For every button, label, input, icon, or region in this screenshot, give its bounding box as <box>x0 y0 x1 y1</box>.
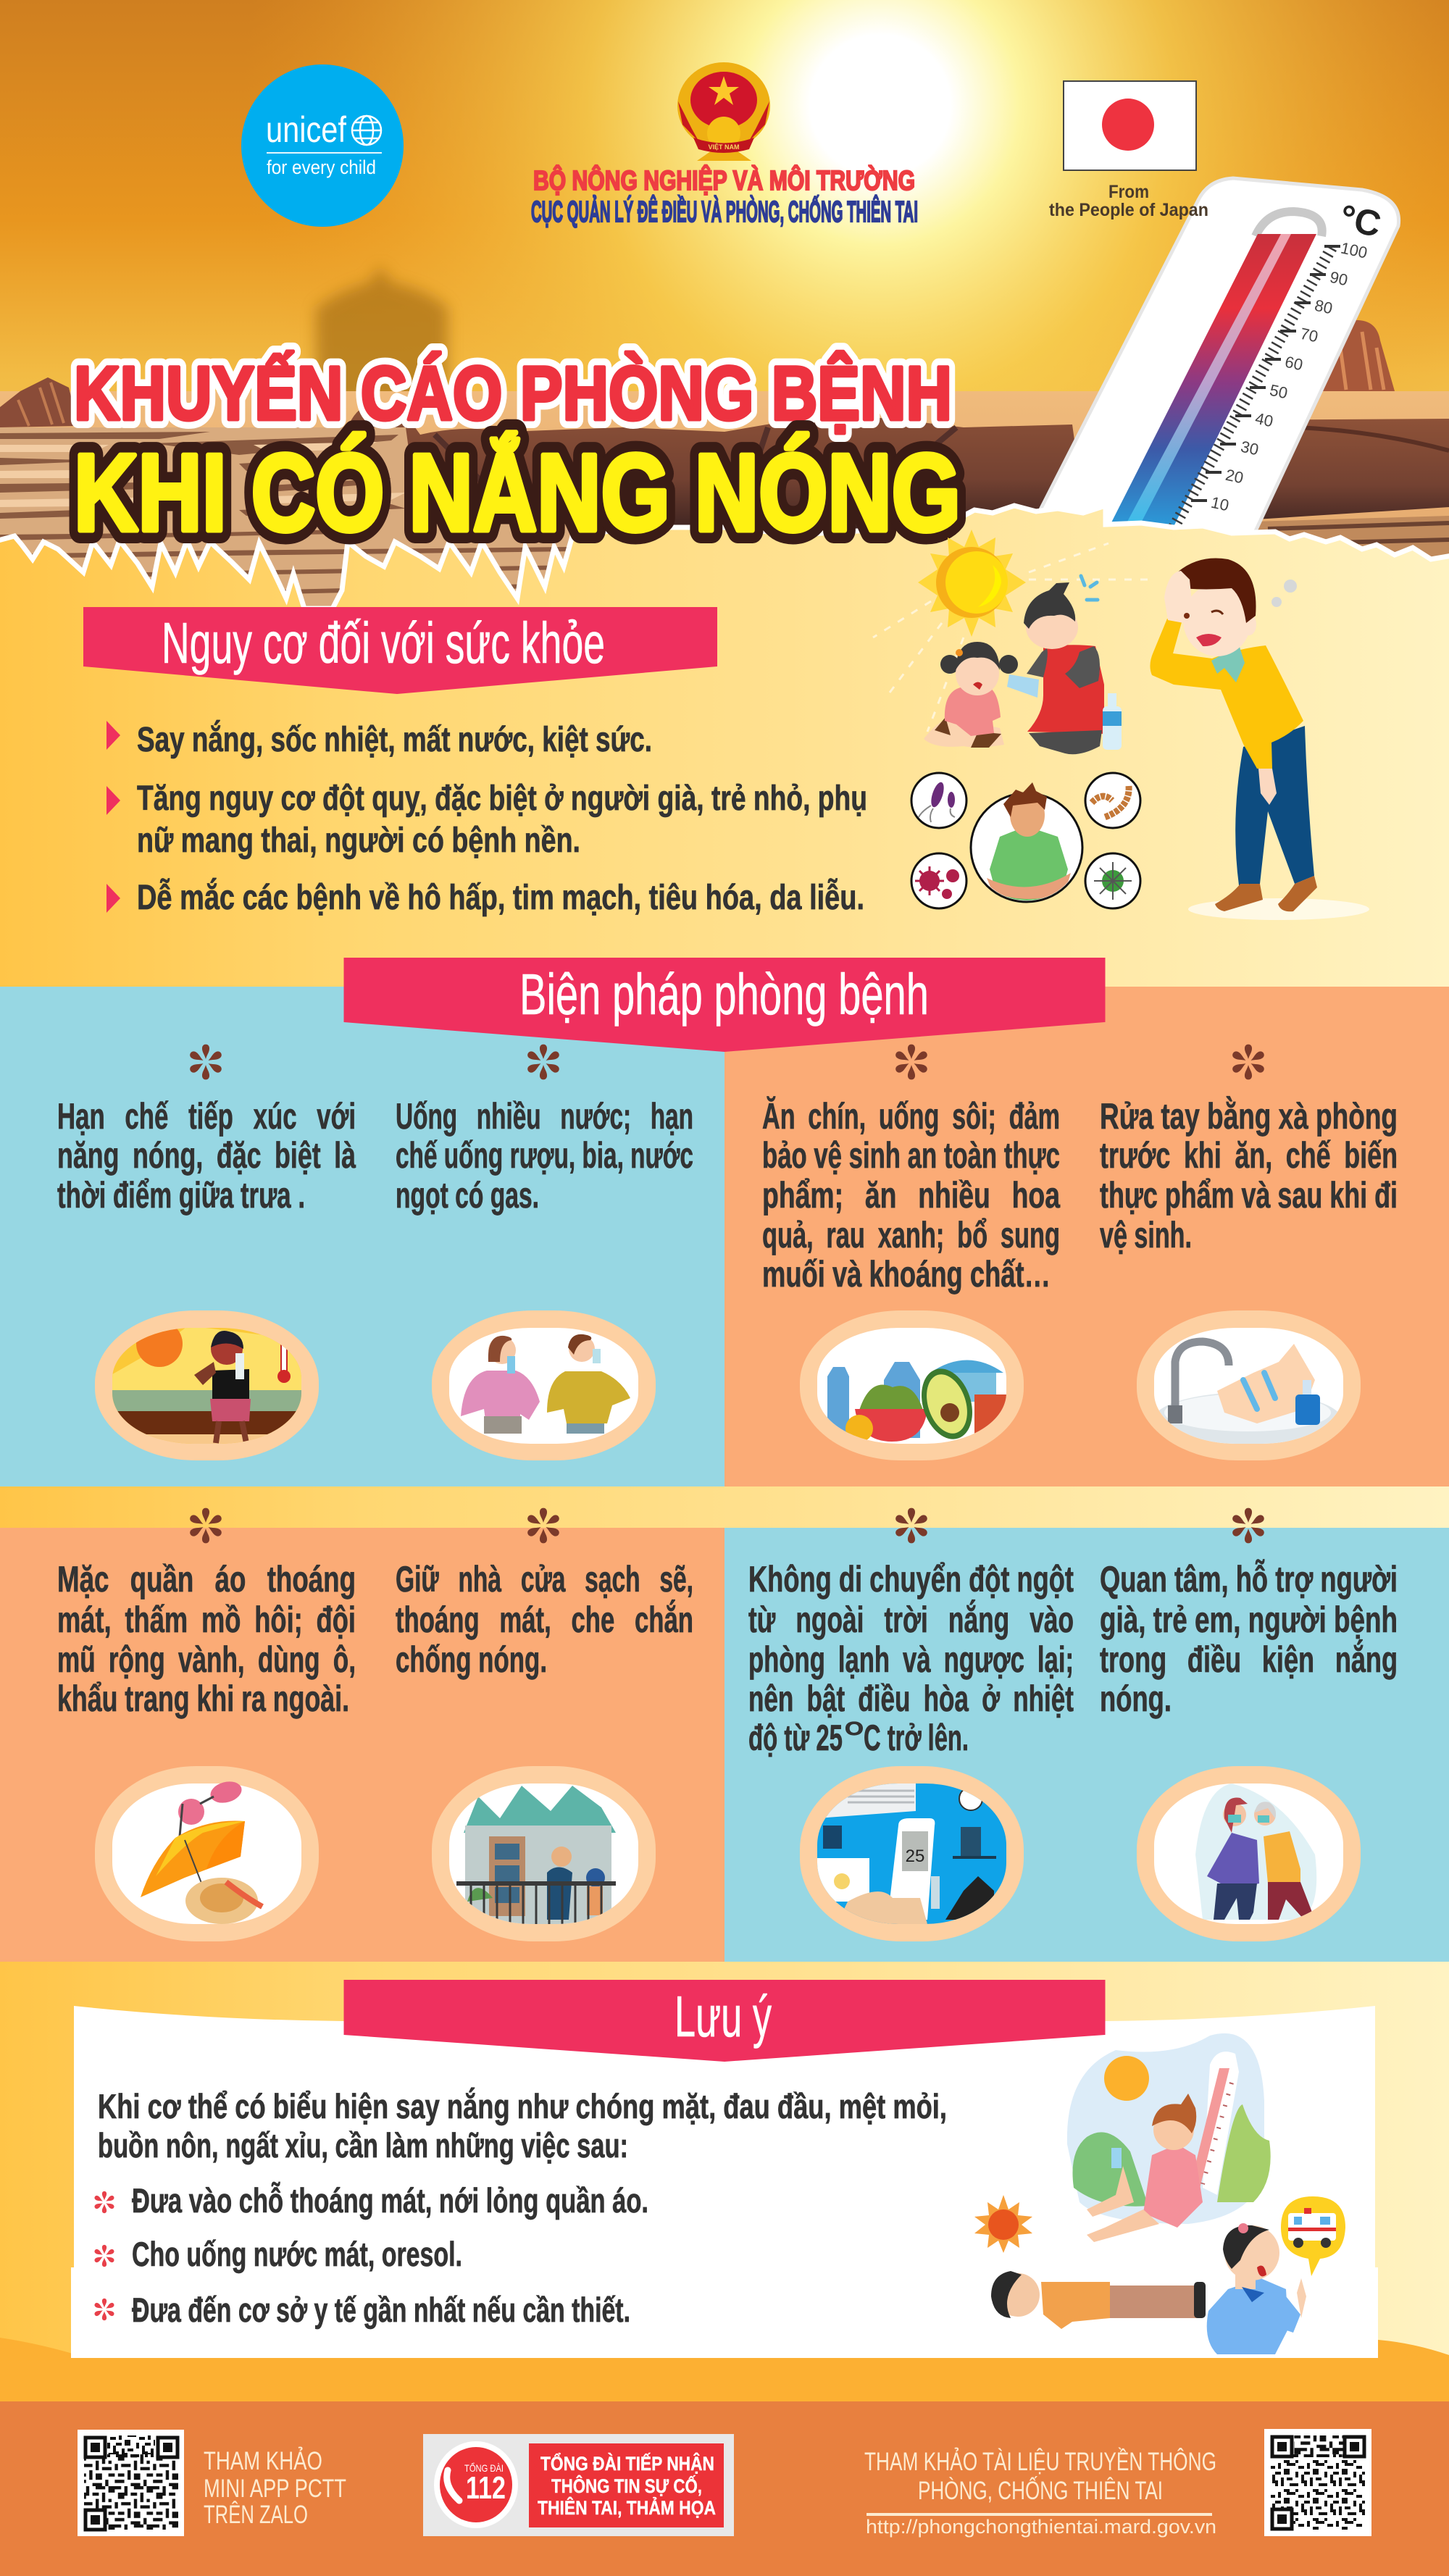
boy in red apron <box>1007 576 1104 754</box>
icon: air conditioner remote at 25 degrees: 25 <box>906 1847 924 1866</box>
tip: food safety: Ăn chín, uống sôi; đảm <box>762 1096 1060 1137</box>
hotline 112 banner <box>423 2434 734 2536</box>
section heading: note <box>343 1980 1106 2062</box>
germ: purple bacteria <box>911 773 966 828</box>
sky and sun background <box>0 0 1449 551</box>
ground shadow <box>1188 898 1369 920</box>
emblem base <box>697 149 751 161</box>
section heading: prevention <box>343 958 1106 1052</box>
scale labels: 30 <box>1239 438 1260 459</box>
tip: temperature change: O <box>845 1718 864 1739</box>
risk list: Tăng nguy cơ đột quỵ, đặc biệt ở người già, trẻ nhỏ, phụ <box>137 779 867 818</box>
risk list: nữ mang thai, người có bệnh nền. <box>137 821 580 860</box>
lower hand <box>1258 769 1277 805</box>
sun <box>918 530 1026 637</box>
title: KHUYẾN CÁO PHÒNG BỆNH <box>74 351 952 436</box>
unicef globe icon <box>352 116 381 145</box>
note list: Đưa đến cơ sở y tế gần nhất nếu cần thiết. <box>132 2291 630 2329</box>
left rock <box>0 377 78 427</box>
tip: limit sun exposure: năng nóng, đặc biệt là <box>57 1135 356 1176</box>
logo: Vietnam national emblem <box>677 62 770 161</box>
thermometer tube <box>1106 234 1316 532</box>
tip: temperature change: phòng lạnh và ngược lại; <box>748 1639 1074 1680</box>
distant tower silhouette <box>316 266 448 406</box>
icon: washing hands <box>1137 1310 1361 1460</box>
tip: clean home <box>396 1559 693 1680</box>
footer text: Zalo: THAM KHẢO <box>204 2446 322 2475</box>
head <box>1183 584 1251 656</box>
title: KHI CÓ NẮNG NÓNG <box>74 431 961 553</box>
note intro text: Khi cơ thể có biểu hiện say nắng như chóng mặt, đau đầu, mệt mỏi, <box>98 2087 947 2125</box>
scale labels: 60 <box>1283 353 1304 374</box>
illustration: girl overheating by thermometer <box>1067 2033 1271 2242</box>
tip: light clothing: Mặc quần áo thoáng <box>57 1559 356 1599</box>
hotline 112 banner: THÔNG TIN SỰ CỐ, <box>551 2474 702 2497</box>
tip: temperature change: độ từ 25 <box>748 1718 843 1758</box>
marker 2 <box>93 2245 115 2267</box>
section heading: health risks <box>83 607 717 694</box>
risk list <box>107 719 867 917</box>
scale labels: 70 <box>1298 325 1319 346</box>
scale ticks <box>1171 248 1332 532</box>
illustration: sick boy with germs <box>911 773 1140 908</box>
hair <box>1177 558 1256 623</box>
illustration: sun with two sick children <box>873 530 1152 754</box>
marker 1 <box>93 2191 115 2213</box>
tip: light clothing: khẩu trang khi ra ngoài. <box>57 1678 349 1719</box>
sun rays dashed <box>873 543 1152 732</box>
thermometer <box>1032 178 1399 543</box>
tip: drink water <box>396 1096 693 1216</box>
bottom wave background <box>0 2338 1449 2405</box>
sun <box>1104 2056 1149 2101</box>
sunglasses <box>178 1778 244 1836</box>
bushes <box>1072 2132 1148 2207</box>
scale labels <box>1209 238 1369 514</box>
bullet 3 <box>107 884 120 913</box>
scale labels: 100 <box>1339 238 1369 262</box>
note list: Cho uống nước mát, oresol. <box>132 2235 462 2273</box>
panel: note card <box>71 2006 1378 2358</box>
icon: food and clean water <box>800 1310 1024 1460</box>
icon: helping the elderly <box>1137 1766 1361 1941</box>
sweat drops <box>1271 580 1297 607</box>
tip: temperature change: Không di chuyển đột ngột <box>748 1559 1074 1599</box>
tip: wash hands <box>1100 1096 1398 1255</box>
risk list: Dễ mắc các bệnh về hô hấp, tim mạch, tiêu hóa, da liễu. <box>137 877 864 917</box>
QR code: Zalo mini app <box>78 2430 184 2536</box>
icon: umbrella, sunglasses and hat <box>95 1766 319 1941</box>
note list <box>93 2181 648 2329</box>
tip: light clothing: mũ rộng vành, dùng ô, <box>57 1639 356 1680</box>
tip: drink water: chế uống rượu, bia, nước <box>396 1135 693 1176</box>
title: KHI CÓ NẮNG NÓNG <box>74 431 961 553</box>
emblem ribbon <box>693 138 754 153</box>
tip: care for vulnerable people <box>1100 1559 1398 1719</box>
tip: limit sun exposure: Hạn chế tiếp xúc với <box>57 1096 356 1137</box>
footer text: reference documents <box>864 2447 1216 2538</box>
sun hat <box>185 1878 262 1924</box>
logo: Japan flag: the People of Japan <box>1049 200 1208 220</box>
mouth <box>1196 634 1222 646</box>
tip: clean home: thoáng mát, che chắn <box>396 1599 693 1640</box>
footer text: reference documents: THAM KHẢO TÀI LIỆU TRUYỀN THÔNG <box>864 2447 1216 2476</box>
scale labels: 10 <box>1209 493 1230 514</box>
thermometer cap <box>1256 212 1322 236</box>
tip: wash hands: vệ sinh. <box>1100 1215 1192 1255</box>
tip: clean home: chống nóng. <box>396 1639 547 1680</box>
markers row 1 <box>188 1045 1266 1079</box>
right cliff <box>1313 320 1395 391</box>
tube highlight <box>1122 234 1291 532</box>
logo: Japan flag: From <box>1108 182 1149 202</box>
umbrella <box>141 1820 245 1902</box>
scale labels: 80 <box>1313 296 1334 317</box>
logo: Vietnam national emblem: VIỆT NAM <box>708 143 740 151</box>
shoes <box>1215 884 1263 911</box>
tip: clean home: Giữ nhà cửa sạch sẽ, <box>396 1559 693 1599</box>
tip: temperature change: từ ngoài trời nắng vào <box>748 1599 1074 1640</box>
lying person <box>991 2271 1206 2329</box>
bullet 1 <box>107 721 120 750</box>
note intro text <box>98 2087 947 2165</box>
girl <box>924 642 1018 748</box>
tip: temperature change: nên bật điều hòa ở nhiệt <box>748 1678 1074 1719</box>
footer band <box>0 2401 1449 2576</box>
section heading: prevention: Biện pháp phòng bệnh <box>519 962 929 1026</box>
scale labels: 90 <box>1328 268 1349 289</box>
icon: people drinking water <box>432 1310 656 1460</box>
icon: small orange sun <box>974 2195 1032 2253</box>
ministry name <box>531 164 918 228</box>
scale labels: 40 <box>1253 409 1274 430</box>
illustration: collapsed person and helper <box>991 2223 1306 2354</box>
footer text: Zalo <box>204 2446 346 2529</box>
tip: food safety: bảo vệ sinh an toàn thực <box>762 1135 1060 1176</box>
tip: food safety: phẩm; ăn nhiều hoa <box>762 1175 1061 1216</box>
ministry name: BỘ NÔNG NGHIỆP VÀ MÔI TRƯỜNG <box>533 164 915 196</box>
QR code: website <box>1264 2429 1371 2536</box>
tip: drink water: ngọt có gas. <box>396 1175 539 1216</box>
footer text: reference documents: PHÒNG, CHỐNG THIÊN TAI <box>918 2476 1163 2505</box>
logo: unicef: unicef <box>266 109 346 150</box>
tip: limit sun exposure <box>57 1096 356 1216</box>
thermometer <box>1203 2052 1239 2195</box>
markers row 2 <box>188 1508 1266 1543</box>
tip: drink water: Uống nhiều nước; hạn <box>396 1096 693 1137</box>
footer text: Zalo: TRÊN ZALO <box>204 2501 308 2529</box>
section heading: health risks: Nguy cơ đối với sức khỏe <box>162 611 605 675</box>
text: CỤC QUẢN LÝ ĐÊ ĐIỀU VÀ PHÒNG, CHỐNG THIÊN TAI <box>531 195 918 228</box>
sick boy circle <box>971 782 1082 902</box>
tip: light clothing <box>57 1559 356 1719</box>
icon: man in hot sun <box>95 1310 319 1460</box>
thermometer body <box>1032 178 1399 543</box>
title <box>74 351 961 553</box>
icon: cool clean house <box>432 1766 656 1941</box>
scale labels: 50 <box>1268 381 1289 402</box>
sweater <box>1150 619 1303 769</box>
panel: prevention row 2 right (blue) <box>724 1528 1449 1962</box>
blue backdrop <box>1067 2033 1264 2224</box>
collar <box>1211 645 1245 682</box>
icon: air conditioner remote at 25 degrees <box>800 1766 1024 1941</box>
helper woman <box>1207 2223 1306 2354</box>
panel: prevention row 2 left (orange) <box>0 1528 724 1962</box>
tip: light clothing: mát, thấm mồ hôi; đội <box>57 1599 356 1640</box>
phone icon <box>447 2470 459 2501</box>
marker 3 <box>93 2299 115 2320</box>
torn paper edge <box>0 506 1449 1029</box>
hotline 112 banner: TỔNG ĐÀI <box>464 2462 504 2474</box>
title: KHUYẾN CÁO PHÒNG BỆNH <box>74 351 952 436</box>
germ: orange worm <box>1085 773 1140 828</box>
icon: ambulance speech bubble <box>1281 2196 1345 2276</box>
tip: food safety: quả, rau xanh; bổ sung <box>762 1215 1060 1255</box>
water bottle <box>1103 693 1122 750</box>
degree celsius label: °C <box>1337 197 1385 245</box>
section heading: note: Lưu ý <box>675 1984 772 2049</box>
tip: temperature change <box>748 1559 1074 1758</box>
hotline 112 banner: TỔNG ĐÀI TIẾP NHẬN <box>540 2452 714 2475</box>
tip: food safety: muối và khoáng chất… <box>762 1254 1051 1295</box>
risk list: Say nắng, sốc nhiệt, mất nước, kiệt sức. <box>137 719 652 759</box>
desert ground with cliffs and cracked earth <box>0 320 1449 630</box>
logo: unicef <box>241 64 404 227</box>
germ: red virus <box>911 853 966 908</box>
trousers <box>1235 726 1314 885</box>
tip: temperature change: C trở lên. <box>864 1718 969 1758</box>
germ: green virus <box>1085 853 1140 908</box>
note intro text: buồn nôn, ngất xỉu, cần làm những việc sau: <box>98 2126 628 2165</box>
illustration: man with heat exhaustion <box>1150 558 1369 920</box>
panel: prevention row 1 right (orange) <box>724 987 1449 1486</box>
logo: Japan flag <box>1049 81 1208 220</box>
hotline 112 banner: 112 <box>466 2470 506 2506</box>
scale labels: 20 <box>1224 466 1245 487</box>
note list: Đưa vào chỗ thoáng mát, nới lỏng quần áo. <box>132 2181 648 2220</box>
girl <box>1143 2144 1203 2228</box>
central rock band <box>348 403 1087 529</box>
logo: unicef: for every child <box>267 156 376 178</box>
raising hand <box>1164 571 1192 623</box>
footer text: Zalo: MINI APP PCTT <box>204 2475 346 2503</box>
tip: food safety <box>762 1096 1061 1295</box>
footer text: reference documents: http://phongchongthientai.mard.gov.vn <box>866 2516 1216 2538</box>
tip: care for vulnerable people: nóng. <box>1100 1678 1172 1719</box>
tip: limit sun exposure: thời điểm giữa trưa . <box>57 1175 305 1216</box>
hotline 112 banner: THIÊN TAI, THẢM HỌA <box>538 2496 716 2519</box>
cracked earth plates <box>0 427 580 623</box>
bullet 2 <box>107 786 120 815</box>
panel: prevention row 1 left (blue) <box>0 987 724 1486</box>
